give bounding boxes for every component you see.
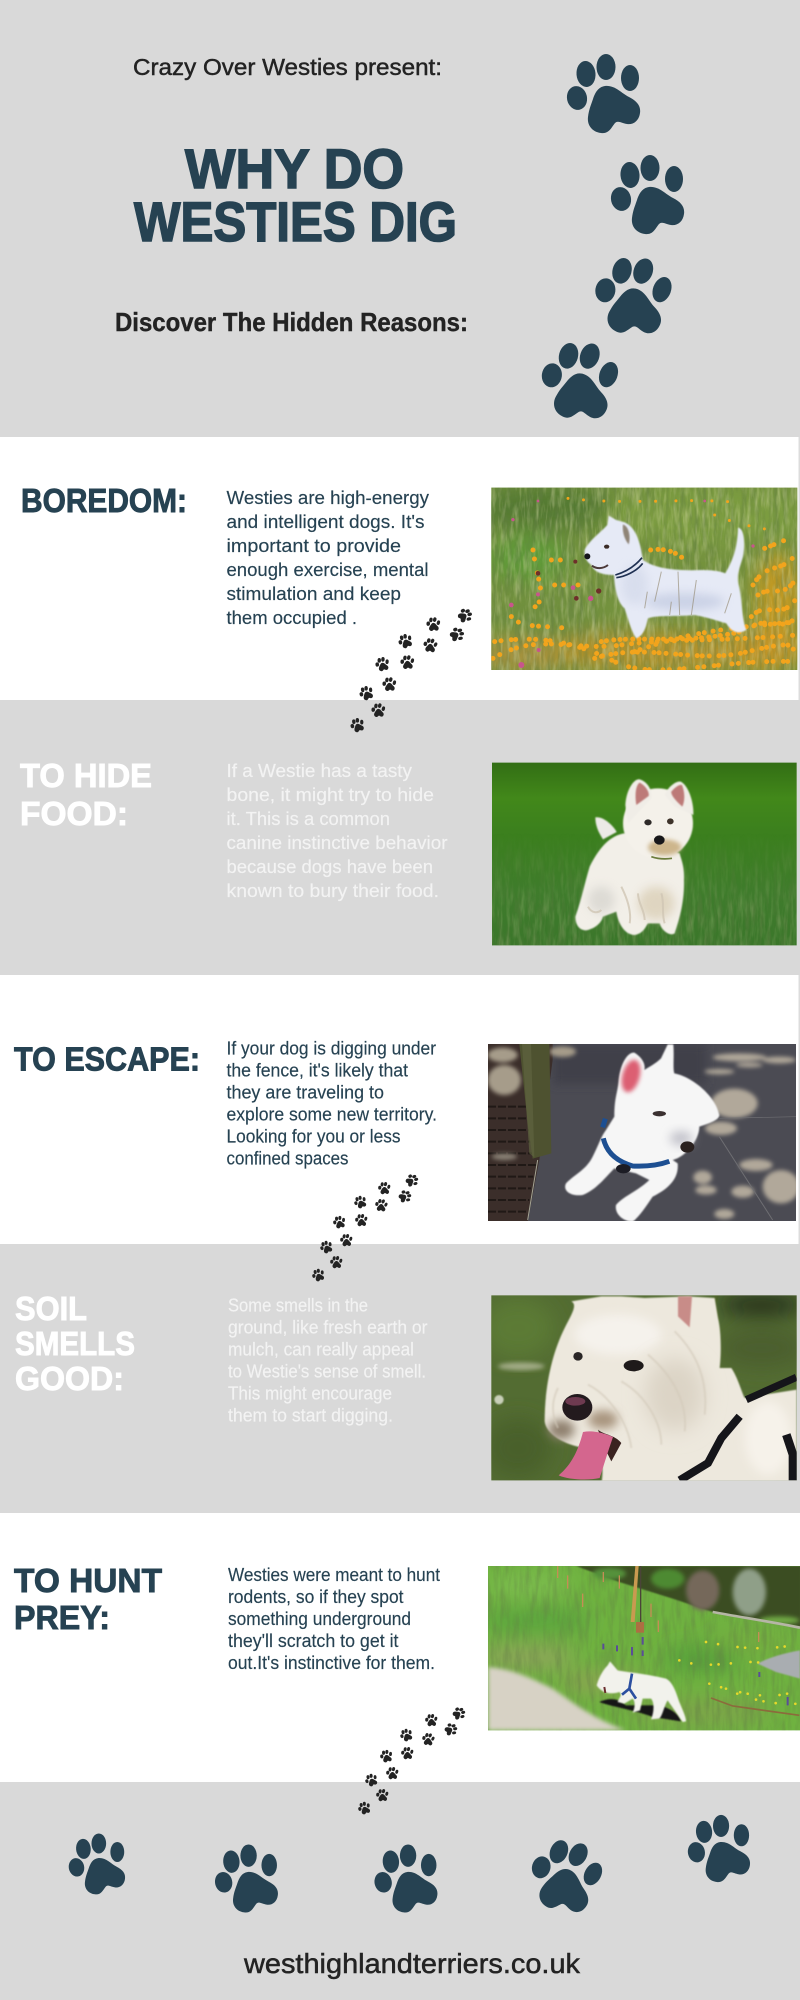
photo: westie on grassy hillside <box>476 1562 800 1735</box>
text block: to hide food: canine instinctive behavior <box>226 833 448 853</box>
paw trail: to escape to soil smells good <box>312 1172 420 1282</box>
text block: to escape: If your dog is digging under <box>226 1038 436 1058</box>
dog <box>545 1296 797 1485</box>
heading: soil smells good: SMELLS <box>15 1325 135 1362</box>
text block: soil smells good: Some smells in the <box>228 1296 368 1316</box>
heading: to escape: TO ESCAPE: <box>14 1040 200 1078</box>
title <box>134 137 457 253</box>
text block: boredom: stimulation and keep <box>226 584 401 604</box>
text block: soil smells good <box>228 1296 428 1426</box>
panel: to hunt prey <box>14 1566 800 1730</box>
presenter line: Crazy Over Westies present: <box>133 54 442 80</box>
text block: to hunt prey: rodents, so if they spot <box>228 1587 404 1607</box>
text block: to hunt prey: out.It's instinctive for them. <box>228 1653 435 1673</box>
text block: soil smells good: ground, like fresh earth or <box>228 1318 428 1338</box>
heading: soil smells good: GOOD: <box>15 1360 124 1397</box>
text block: to hunt prey: Westies were meant to hunt <box>228 1565 440 1585</box>
text block: to escape: they are traveling to <box>226 1082 384 1102</box>
heading: soil smells good <box>15 1290 135 1397</box>
text block: to hide food: If a Westie has a tasty <box>226 761 412 781</box>
dog <box>599 1699 681 1721</box>
website address: westhighlandterriers.co.uk <box>243 1948 581 1979</box>
panel: to escape <box>0 975 800 1244</box>
text block: boredom: them occupied . <box>226 608 357 628</box>
photo: westie face close-up <box>481 1288 800 1485</box>
text block: to hunt prey: they'll scratch to get it <box>228 1631 398 1651</box>
paw trail: to hunt prey to footer <box>358 1705 467 1815</box>
text block: to hide food: known to bury their food. <box>226 881 439 901</box>
text block: soil smells good: mulch, can really appeal <box>228 1340 414 1360</box>
heading: to hide food: TO HIDE <box>20 757 152 794</box>
title: WHY DO <box>185 137 404 200</box>
heading: to hunt prey: TO HUNT <box>14 1562 162 1599</box>
panel: boredom <box>0 437 800 700</box>
text block: boredom <box>226 488 429 628</box>
dog <box>575 779 693 935</box>
text block: soil smells good: This might encourage <box>228 1384 392 1404</box>
photo: westie in flower meadow <box>491 488 798 670</box>
subtitle: Discover The Hidden Reasons: <box>115 307 468 337</box>
text block: to hide food: because dogs have been <box>226 857 433 877</box>
heading: boredom: BOREDOM: <box>21 482 187 519</box>
panel: soil smells good <box>0 1244 800 1513</box>
heading: soil smells good: SOIL <box>15 1290 87 1327</box>
text block: to hide food <box>226 761 448 901</box>
title: WESTIES DIG <box>134 190 457 253</box>
text block: to hunt prey: something underground <box>228 1609 411 1629</box>
dog <box>585 516 746 638</box>
heading: to hide food <box>20 757 152 832</box>
text block: soil smells good: them to start digging. <box>228 1406 393 1426</box>
heading: to hide food: FOOD: <box>20 795 128 832</box>
text block: boredom: important to provide <box>226 536 401 556</box>
dog <box>565 1044 719 1222</box>
text block: boredom: enough exercise, mental <box>226 560 428 580</box>
text block: boredom: Westies are high-energy <box>226 488 429 508</box>
paw trail: boredom to hide food <box>350 607 474 732</box>
photo: westie lying on pavement <box>486 1040 799 1227</box>
text block: to escape <box>226 1038 437 1168</box>
icon: large paw prints <box>528 54 684 430</box>
text block: to hunt prey <box>228 1565 440 1673</box>
heading: to hunt prey: PREY: <box>14 1599 110 1636</box>
text block: to escape: the fence, it's likely that <box>226 1060 408 1080</box>
text block: to escape: Looking for you or less <box>226 1126 400 1146</box>
text block: soil smells good: to Westie's sense of smell. <box>228 1362 426 1382</box>
text block: to hide food: it. This is a common <box>226 809 390 829</box>
text block: to escape: explore some new territory. <box>226 1104 437 1124</box>
panel: header <box>0 0 800 437</box>
panel: to hide food <box>0 700 800 975</box>
heading: to hunt prey <box>14 1562 162 1636</box>
icon: footer paw prints <box>67 1815 750 1923</box>
text block: to hide food: bone, it might try to hide <box>226 785 434 805</box>
text block: boredom: and intelligent dogs. It's <box>226 512 424 532</box>
photo: westie on green lawn <box>488 760 800 950</box>
text block: to escape: confined spaces <box>226 1148 348 1168</box>
panel: footer <box>0 1782 800 2000</box>
